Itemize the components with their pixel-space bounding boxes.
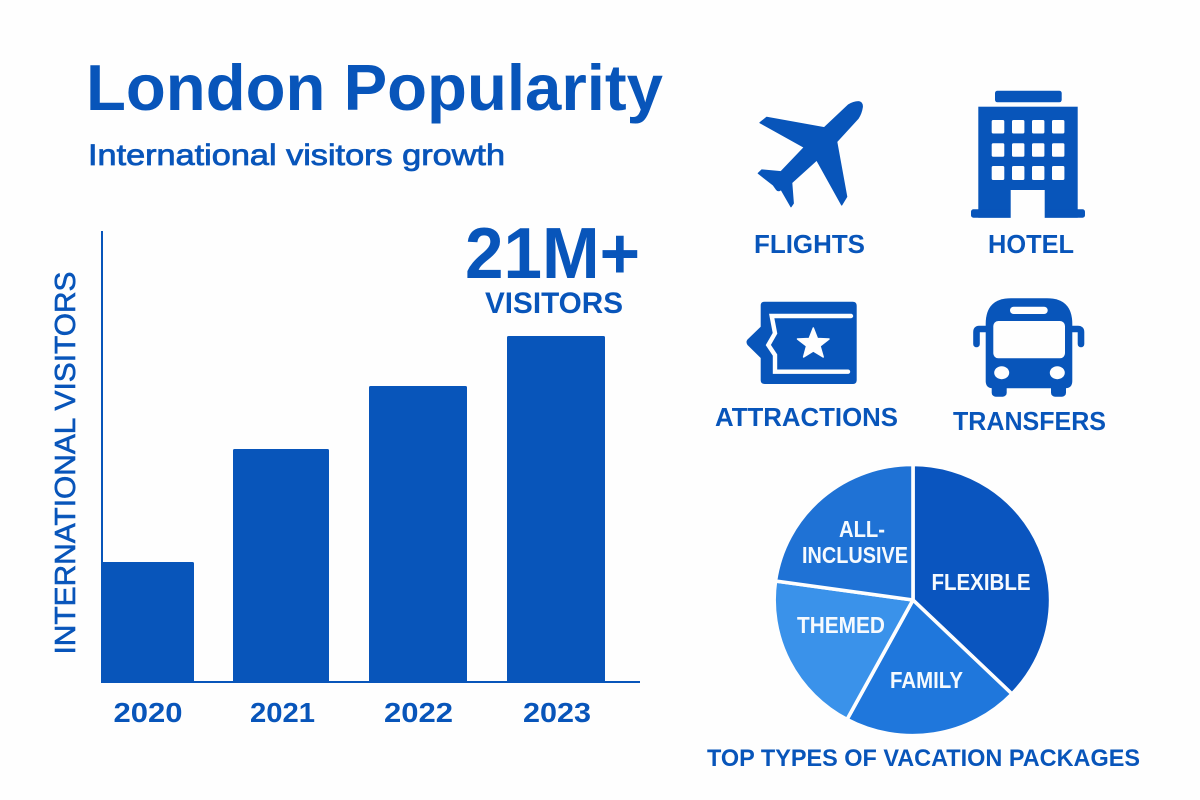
pie label: themed: THEMED [797, 612, 885, 638]
label: attractions: ATTRACTIONS [715, 402, 898, 432]
title: London Popularity [86, 51, 663, 124]
slice: all-inclusive [776, 464, 913, 600]
pie label: all-inclusive: ALL- [839, 516, 885, 542]
bar 2021 [233, 449, 329, 683]
bar 2022 [369, 386, 467, 683]
pie chart caption: TOP TYPES OF VACATION PACKAGES [707, 745, 1140, 772]
year label 2020: 2020 [114, 697, 182, 728]
pie label: all-inclusive: INCLUSIVE [802, 542, 908, 568]
slice: family [847, 600, 1012, 736]
pie label: all-inclusive [802, 516, 908, 568]
year label 2023: 2023 [523, 697, 591, 728]
slice: flexible [913, 464, 1051, 694]
bar 2023 [507, 336, 605, 683]
icon: hotel [971, 91, 1085, 218]
pie label: flexible: FLEXIBLE [932, 569, 1030, 595]
year label 2021: 2021 [250, 697, 315, 728]
slice: themed [774, 581, 913, 720]
icon: transfers bus [976, 298, 1081, 397]
bar chart: international visitors [50, 214, 640, 728]
y axis label: INTERNATIONAL VISITORS [50, 272, 82, 654]
label: hotel: HOTEL [988, 229, 1074, 259]
pie label: family: FAMILY [890, 667, 963, 693]
chart axes [102, 231, 640, 682]
bar 2020 [102, 562, 194, 683]
callout value: 21M+ [465, 214, 640, 294]
subtitle: International visitors growth [88, 139, 505, 172]
pie chart: vacation package types [774, 464, 1051, 736]
icon: airplane [758, 102, 862, 207]
label: transfers: TRANSFERS [953, 406, 1106, 436]
callout caption: VISITORS [485, 287, 623, 320]
label: flights: FLIGHTS [754, 229, 865, 259]
icon: attractions ticket [746, 302, 857, 384]
year label 2022: 2022 [384, 697, 453, 728]
